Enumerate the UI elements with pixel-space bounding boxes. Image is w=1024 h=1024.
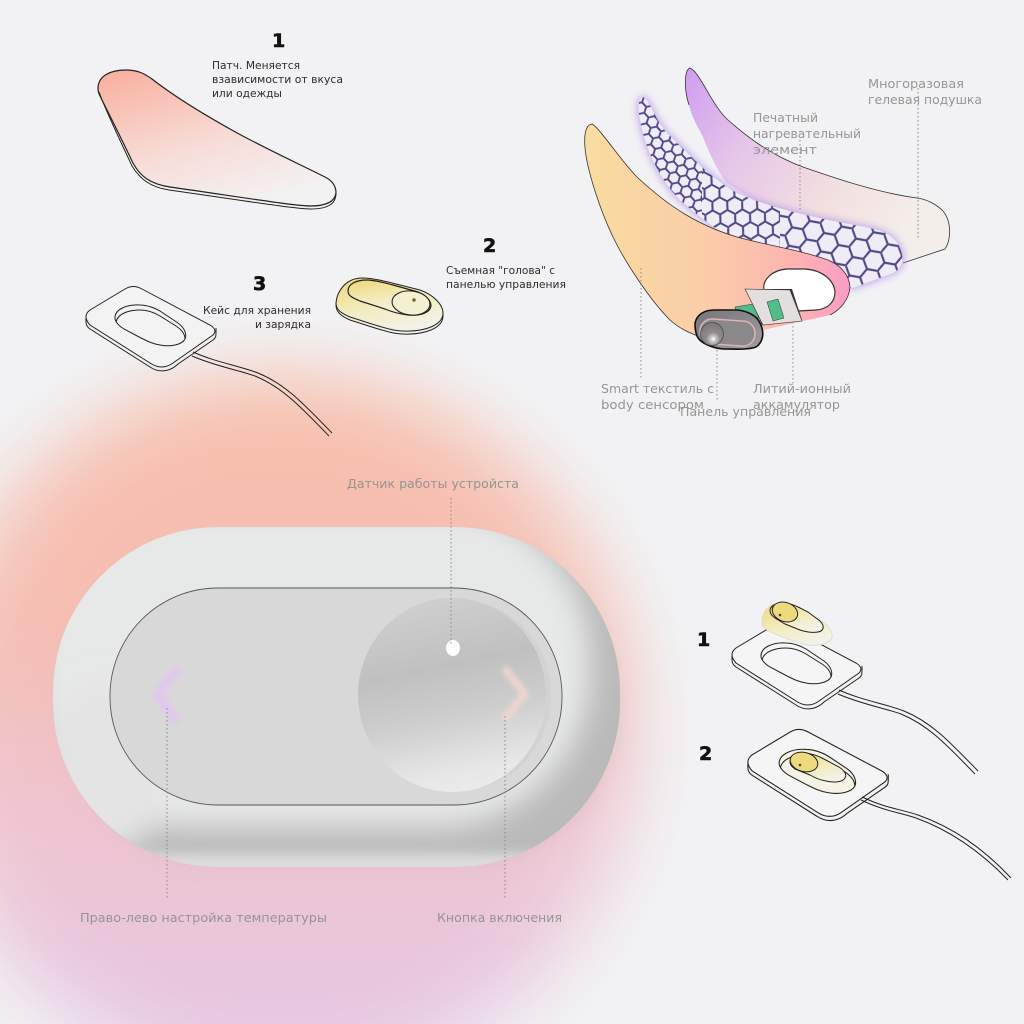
step 2 illustration [748,729,1011,880]
text: case: и зарядка [255,318,311,331]
label: sensor: Датчик работы устройста [347,476,519,491]
control panel [695,310,763,349]
text: head: Съемная "голова" с [446,264,555,277]
battery cut-out [764,269,835,312]
label: heater: элемент [753,142,817,157]
text: patch: Патч. Меняется [212,59,300,72]
dotted leader: gel [917,88,919,240]
device shadow [72,560,612,856]
label: heater: нагревательный [753,126,861,141]
text: head: панелью управления [446,278,566,291]
heating mesh glow [639,97,902,288]
lifted head [762,599,832,645]
heating mesh [638,97,902,288]
gradient glow [0,336,668,1024]
device body [53,527,620,867]
head illustration [336,278,443,334]
textile outline [585,124,850,336]
number 1: 1 [272,30,285,52]
big device [53,527,620,867]
green component back [735,304,759,320]
label: battery: Литий-ионный [753,381,851,396]
right chevron [504,668,525,720]
label: textile: Smart текстиль с [601,381,714,396]
docked head [788,749,846,782]
cable [861,797,1011,880]
step 1 illustration [732,599,978,774]
gel pad outline [685,68,950,263]
dotted leader: textile [640,268,642,380]
dotted leader: power [504,716,506,900]
lithium battery [747,289,802,325]
step number 2: 2 [699,743,712,765]
smart textile [585,124,850,336]
green component front [767,299,784,321]
label: power button: Кнопка включения [437,910,562,925]
label: gel pad: Многоразовая [868,76,964,91]
left chevron [157,668,178,722]
patch illustration [98,70,336,209]
dotted leader: battery [792,322,794,383]
dotted leader: heater [799,140,801,210]
label: textile: body сенсором [601,397,704,412]
case illustration [86,286,332,436]
step number 1: 1 [697,629,710,651]
text: patch: или одежды [212,87,282,100]
power button dish [358,598,546,792]
label: heater: Печатный [753,110,818,125]
dotted leader: temperature [166,708,168,900]
label: gel pad: гелевая подушка [868,92,982,107]
sensor light [446,640,460,656]
exploded patch diagram [585,68,950,349]
number 3: 3 [253,273,266,295]
dotted leader: panel [716,350,718,400]
battery face [745,289,802,325]
cable [192,352,332,436]
text: patch: взависимости от вкуса [212,73,343,86]
label: control panel: Панель управления [680,404,811,419]
text: case: Кейс для хранения [203,304,311,317]
power button rim [369,600,551,790]
dotted leader: sensor [450,498,452,644]
label: battery: аккамулятор [753,397,840,412]
number 2: 2 [483,235,496,257]
gel pad [685,68,950,263]
device top face [110,588,562,805]
label: temperature: Право-лево настройка температуры [80,910,327,925]
